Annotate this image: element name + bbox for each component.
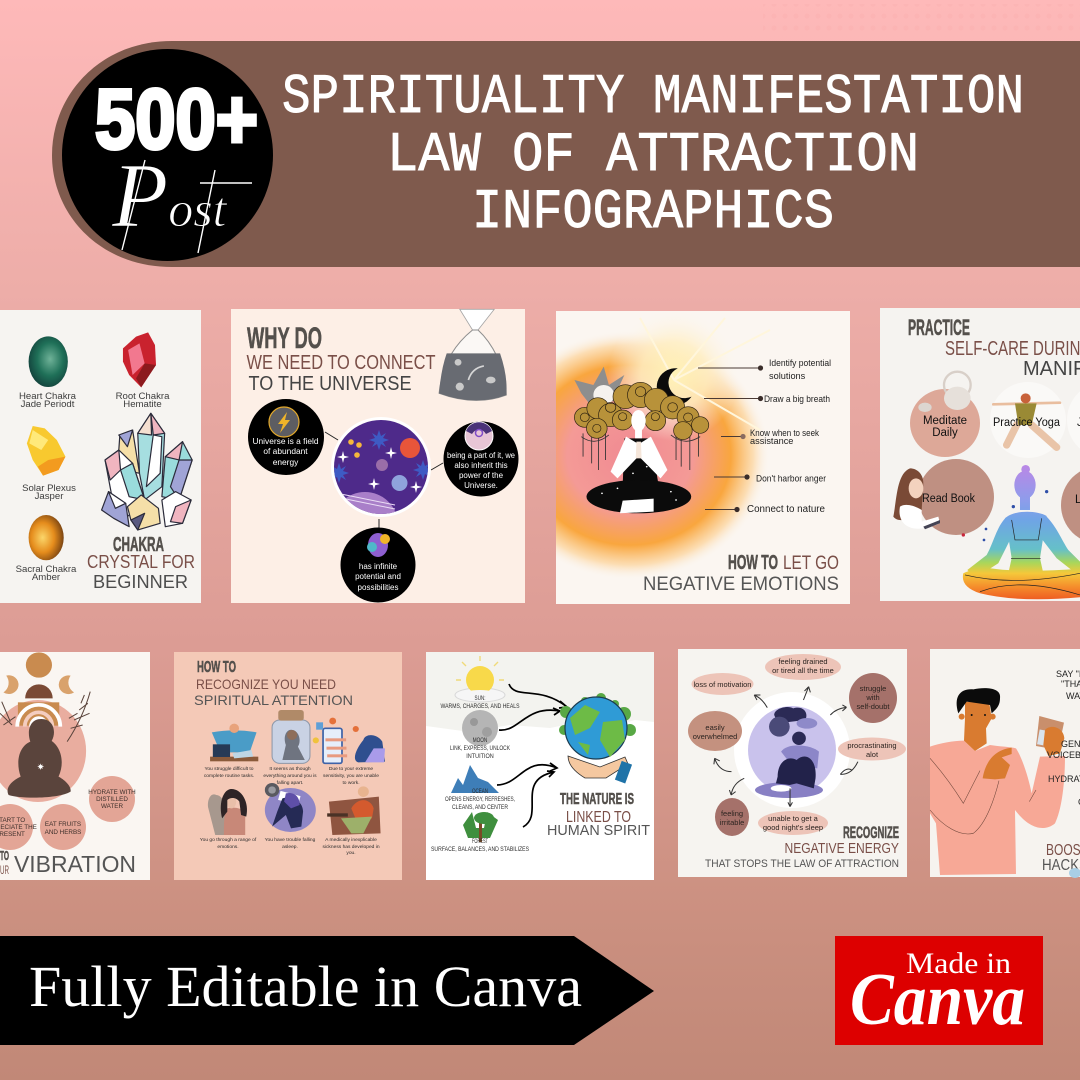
heading: recognize spiritual attention: [194, 659, 353, 708]
illustration: distressed seated figure: [734, 692, 850, 808]
illustration: meditating silhouette with moons: [0, 652, 90, 802]
heading: recognize negative energy: NEGATIVE ENERGY: [784, 840, 899, 857]
circle: start to appreciate the present: [0, 804, 37, 850]
heading: recognize negative energy: THAT STOPS THE LAW OF ATTRACTION: [705, 858, 899, 870]
illustrations: sun, moon, ocean, forest: [451, 656, 505, 842]
text: vocal tips: [1047, 669, 1080, 807]
heading: nature linked to human spirit: HUMAN SPIRIT: [547, 823, 650, 839]
blob labels: easily: [705, 723, 725, 732]
captions: symptoms: complete routine tasks.: [204, 773, 254, 779]
callouts: letting go tips: Identify potential: [769, 358, 831, 368]
illustrations: six struggling figures: [208, 710, 385, 835]
heading: nature linked to human spirit: [547, 791, 650, 839]
captions: symptoms: you.: [346, 851, 356, 856]
heading: boost hacks: [1042, 842, 1080, 874]
blob labels: or tired all the time: [772, 666, 834, 675]
blob labels: feeling drained: [778, 657, 828, 666]
circle: universe is a field of abundant energy: [248, 399, 324, 475]
captions: symptoms: A medically inexplicable: [325, 837, 377, 843]
heading: practice self-care: PRACTICE: [908, 315, 970, 340]
blob labels: struggle: [860, 684, 886, 693]
background glow: [556, 318, 770, 574]
heading: why do we need to connect: WHY DO: [247, 322, 322, 355]
circle: hydrate with distilled water: HYDRATE WITH: [88, 789, 136, 796]
heading: vibration: VIBRATION: [14, 851, 136, 877]
heading: chakra crystal for beginner: [87, 534, 195, 592]
illustration: man holding packet: [930, 688, 1065, 875]
symptom blobs: [688, 654, 906, 836]
blob labels: overwhelmed: [693, 732, 737, 741]
blob labels: with: [865, 693, 880, 702]
panel: practice self-care during manifestation: [880, 308, 1080, 601]
captions: symptoms: sickness has developed in: [322, 844, 380, 850]
captions: nature elements: SUN:: [474, 695, 486, 702]
circle: hydrate with distilled water: [88, 776, 136, 822]
circle: eat fruits and herbs: AND HERBS: [45, 829, 81, 836]
circle: universe is a field of abundant energy: Universe is a field: [252, 436, 319, 446]
callouts: letting go tips: Know when to seek: [750, 428, 819, 438]
captions: nature elements: INTUITION: [466, 753, 494, 760]
illustration: globe in hand: [559, 693, 636, 783]
labels: self-care activities: Practice Yoga: [993, 417, 1061, 429]
labels: self-care activities: [922, 415, 1080, 506]
captions: nature elements: [431, 695, 529, 853]
heading: why do we need to connect: TO THE UNIVERSE: [248, 373, 412, 395]
panel: raise your vibration: [0, 652, 150, 880]
gem labels: Jade Periodt: [21, 399, 75, 410]
heading: vibration: TO: [0, 848, 9, 863]
illustrations: teapot, yoga, reading: [893, 372, 1060, 529]
blob labels: unable to get a: [768, 814, 819, 823]
captions: symptoms: to work.: [342, 780, 360, 786]
gem labels: Jasper: [35, 491, 64, 502]
captions: nature elements: CLEANS, AND CENTER: [452, 804, 508, 811]
badge: made in canva: Made in: [906, 947, 1011, 980]
captions: symptoms: asleep.: [282, 844, 298, 850]
panel: chakra crystal for beginner: [0, 310, 201, 603]
connector lines: [325, 432, 443, 528]
heading: how to let go negative emotions: HOW TO: [728, 552, 778, 574]
circle: being a part of it: also inherit this: [454, 461, 508, 470]
circle: has infinite potential: has infinite: [359, 562, 398, 571]
heading: recognize spiritual attention: HOW TO: [197, 659, 236, 676]
heading: chakra crystal for beginner: CHAKRA: [113, 534, 164, 556]
header banner: [52, 41, 1080, 267]
crystal gems: [27, 332, 156, 560]
captions: symptoms: You go through a range of: [200, 837, 257, 843]
circle: universe is a field of abundant energy: energy: [273, 457, 299, 467]
heading: recognize negative energy: RECOGNIZE: [843, 823, 899, 842]
circle: eat fruits and herbs: [40, 804, 86, 850]
captions: nature elements: WARMS, CHARGES, AND HEALS: [440, 703, 520, 710]
circle: hydrate with distilled water: WATER: [101, 803, 123, 810]
blob labels: irritable: [720, 818, 744, 827]
labels: self-care activities: Daily: [932, 427, 958, 439]
title: [282, 65, 1024, 244]
panel: how to let go negative emotions: [556, 311, 850, 604]
panel: why connect to the universe: [231, 309, 525, 603]
heading: how to let go negative emotions: [643, 552, 839, 595]
captions: symptoms: emotions.: [217, 844, 239, 850]
callouts: letting go tips: Connect to nature: [747, 504, 825, 515]
blob labels: feeling: [721, 809, 743, 818]
heading: chakra crystal for beginner: CRYSTAL FOR: [87, 552, 195, 572]
icon: galaxy in a bag: [439, 309, 507, 400]
heading: recognize spiritual attention: RECOGNIZE YOU NEED: [196, 676, 336, 692]
heading: nature linked to human spirit: LINKED TO: [566, 809, 631, 826]
gem labels: Hematite: [123, 399, 162, 410]
heading: nature linked to human spirit: THE NATURE IS: [560, 791, 634, 808]
captions: nature elements: FOREST: [472, 838, 488, 845]
heading: why do we need to connect: WE NEED TO CONNECT: [246, 352, 436, 374]
title: INFOGRAPHICS: [472, 180, 834, 244]
badge: 500+ post: [62, 49, 273, 261]
circle: has infinite potential: possibilities: [358, 583, 398, 592]
captions: nature elements: MOON: [473, 737, 488, 744]
panel: how to recognize you need spiritual attention: [174, 652, 402, 880]
title: LAW OF ATTRACTION: [387, 123, 919, 187]
labels: self-care activities: Meditate: [923, 415, 967, 427]
badge: made in canva: [835, 936, 1043, 1045]
circle: being a part of it: being a part of it, we: [447, 451, 516, 460]
captions: symptoms: It seems as though: [269, 766, 311, 772]
captions: nature elements: OPENS ENERGY, REFRESHES,: [445, 796, 515, 803]
badge: 500+ post: Post: [111, 144, 228, 246]
blob labels: procrastinating: [847, 741, 897, 750]
captions: symptoms: You struggle difficult to: [205, 766, 254, 772]
panel: boost your vocal hacks: [930, 649, 1080, 878]
heading: how to let go negative emotions: LET GO: [783, 553, 839, 574]
heading: why do we need to connect: [246, 322, 436, 395]
heading: practice self-care: [908, 315, 1080, 380]
captions: symptoms: sensitivity, you are unable: [323, 773, 379, 779]
circle: eat fruits and herbs: EAT FRUITS: [45, 821, 81, 828]
heading: how to let go negative emotions: NEGATIVE EMOTIONS: [643, 574, 839, 595]
captions: symptoms: Due to your extreme: [329, 766, 373, 772]
circle: has infinite potential: [340, 528, 416, 602]
gem labels: Sacral Chakra: [16, 564, 77, 575]
captions: symptoms: falling apart.: [277, 780, 303, 786]
heading: chakra crystal for beginner: BEGINNER: [93, 572, 188, 592]
callouts: letting go tips: Don't harbor anger: [756, 474, 826, 484]
captions: symptoms: [200, 766, 380, 856]
circle: being a part of it: [444, 422, 518, 496]
illustration: meditating woman with cloud hair: [574, 367, 709, 513]
circle: universe is a field of abundant energy: of abundant: [263, 446, 308, 456]
captions: symptoms: You have trouble falling: [265, 837, 316, 843]
callouts: letting go tips: [698, 358, 831, 515]
panel: recognize negative energy: [678, 649, 907, 877]
captions: symptoms: everything around you is: [263, 773, 317, 779]
banner: fully editable in canva: [0, 936, 654, 1045]
captions: nature elements: LINK, EXPRESS, UNLOCK: [450, 745, 511, 752]
circle: being a part of it: power of the: [459, 471, 504, 480]
illustration: chakra meditation figure: [962, 465, 1080, 599]
circle: being a part of it: Universe.: [464, 481, 498, 490]
arrows: elements to globe: [497, 684, 567, 827]
blob labels: good night's sleep: [763, 823, 823, 832]
badge: 500+ post: 500+: [95, 72, 258, 166]
crystal cluster: [102, 413, 192, 530]
banner: fully editable in canva: Fully Editable in Canva: [29, 954, 582, 1019]
gem labels: Amber: [32, 572, 61, 583]
activity circles: [910, 382, 1080, 544]
illustration: purple galaxy: [331, 417, 431, 517]
heading: recognize negative energy: [705, 823, 899, 870]
circle: has infinite potential: potential and: [355, 572, 401, 581]
gem labels: Solar Plexus: [22, 483, 76, 494]
captions: nature elements: SURFACE, BALANCES, AND STABILIZES: [431, 846, 529, 853]
gem labels: Heart Chakra: [19, 391, 77, 402]
callouts: letting go tips: assistance: [750, 436, 793, 446]
panel: the nature is linked to human spirit: [426, 652, 654, 880]
circle: hydrate with distilled water: DISTILLED: [96, 796, 128, 803]
blob labels: alot: [866, 750, 879, 759]
badge: made in canva: Canva: [850, 959, 1025, 1041]
captions: nature elements: OCEAN: [472, 788, 488, 795]
blob labels: [693, 657, 897, 832]
small curved arrows: [714, 687, 858, 807]
callouts: letting go tips: solutions: [769, 371, 806, 381]
heading: recognize spiritual attention: SPIRITUAL ATTENTION: [194, 692, 353, 708]
gem labels: [16, 391, 170, 583]
labels: self-care activities: Read Book: [922, 493, 975, 505]
blob labels: loss of motivation: [694, 680, 751, 689]
blob labels: self-doubt: [857, 702, 890, 711]
callouts: letting go tips: Draw a big breath: [764, 394, 830, 404]
gem labels: Root Chakra: [116, 391, 170, 402]
